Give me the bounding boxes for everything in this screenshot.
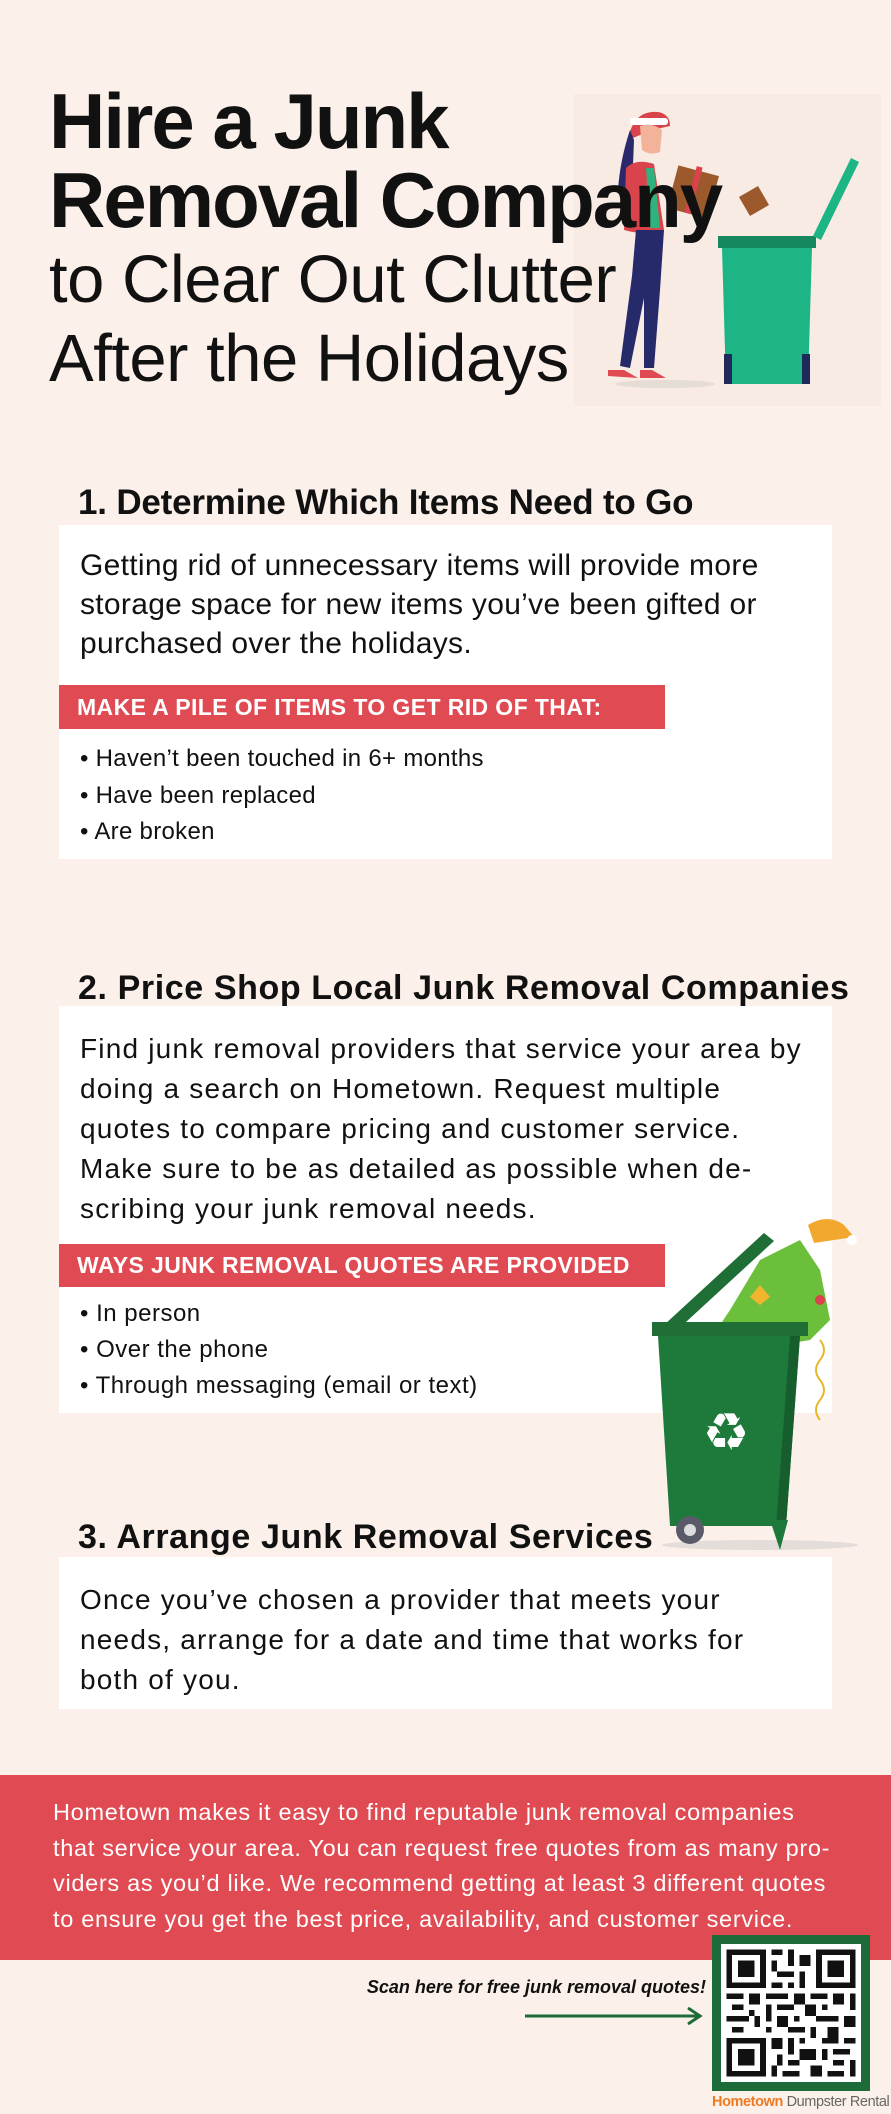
text block: callout: that service your area. You can request free quotes from as many pro-	[53, 1834, 830, 1860]
heading: section 1: 1. Determine Which Items Need to Go	[78, 483, 693, 522]
logo text: Hometown Dumpster Rental	[712, 2094, 889, 2110]
red label bar 2: WAYS JUNK REMOVAL QUOTES ARE PROVIDED	[77, 1252, 630, 1278]
QR code	[712, 1935, 870, 2091]
scan caption: Scan here for free junk removal quotes!	[367, 1977, 706, 1997]
heading: section 3: 3. Arrange Junk Removal Services	[78, 1518, 653, 1556]
text block: section 1 body: Getting rid of unnecessary items will provide more	[80, 549, 759, 582]
title: Hire a Junk	[49, 77, 448, 165]
icon: shadow	[615, 380, 715, 388]
list: items	[80, 745, 484, 845]
icon: woman	[608, 112, 769, 378]
title	[49, 77, 723, 396]
heading: section 2: 2. Price Shop Local Junk Removal Companies	[78, 969, 850, 1007]
list: quote methods: • Through messaging (email or text)	[80, 1372, 478, 1399]
text block: section 1 body	[80, 549, 759, 660]
text block: section 3 body: Once you’ve chosen a provider that meets your	[80, 1584, 721, 1615]
red label bar 1	[59, 685, 665, 729]
text block: section 2 body	[80, 1033, 802, 1224]
text block: section 2 body: doing a search on Hometown. Request multiple	[80, 1073, 721, 1104]
text block: callout: viders as you’d like. We recommend getting at least 3 different quotes	[53, 1870, 826, 1896]
icon: green bin	[718, 158, 859, 384]
text block: section 2 body: quotes to compare pricing and customer service.	[80, 1113, 740, 1144]
arrow	[525, 2006, 703, 2026]
text block: section 1 body: purchased over the holidays.	[80, 627, 472, 660]
panel: section 2	[59, 1006, 832, 1413]
illustration panel: woman and bin	[574, 94, 881, 406]
list: items: • Haven’t been touched in 6+ months	[80, 745, 484, 772]
list: quote methods	[80, 1300, 478, 1399]
text block: section 1 body: storage space for new items you’ve been gifted or	[80, 588, 757, 621]
text block: section 2 body: Make sure to be as detailed as possible when de-	[80, 1153, 752, 1184]
text block: callout: Hometown makes it easy to find reputable junk removal companies	[53, 1799, 795, 1825]
title: Removal Company	[49, 156, 721, 244]
text block: section 2 body: scribing your junk removal needs.	[80, 1193, 537, 1224]
red label bar 1: MAKE A PILE OF ITEMS TO GET RID OF THAT:	[77, 694, 602, 720]
text block: section 3 body: both of you.	[80, 1664, 241, 1695]
panel: section 1	[59, 525, 832, 859]
list: quote methods: • In person	[80, 1300, 201, 1327]
illustration: recycling bin with tree: ♻	[703, 1403, 749, 1463]
text block: section 2 body: Find junk removal providers that service your area by	[80, 1033, 802, 1064]
illustration: recycling bin with tree	[652, 1219, 858, 1550]
text block: section 3 body	[80, 1584, 744, 1695]
title: to Clear Out Clutter	[49, 242, 616, 317]
list: items: • Have been replaced	[80, 782, 316, 808]
list: quote methods: • Over the phone	[80, 1336, 269, 1363]
red label bar 2	[59, 1244, 665, 1287]
text block: callout	[53, 1799, 830, 1932]
title: After the Holidays	[49, 321, 569, 396]
text block: section 3 body: needs, arrange for a date and time that works for	[80, 1624, 744, 1655]
list: items: • Are broken	[80, 818, 215, 845]
callout band	[0, 1775, 891, 1960]
text block: callout: to ensure you get the best price, availability, and customer service.	[53, 1906, 793, 1932]
panel: section 3	[59, 1557, 832, 1709]
